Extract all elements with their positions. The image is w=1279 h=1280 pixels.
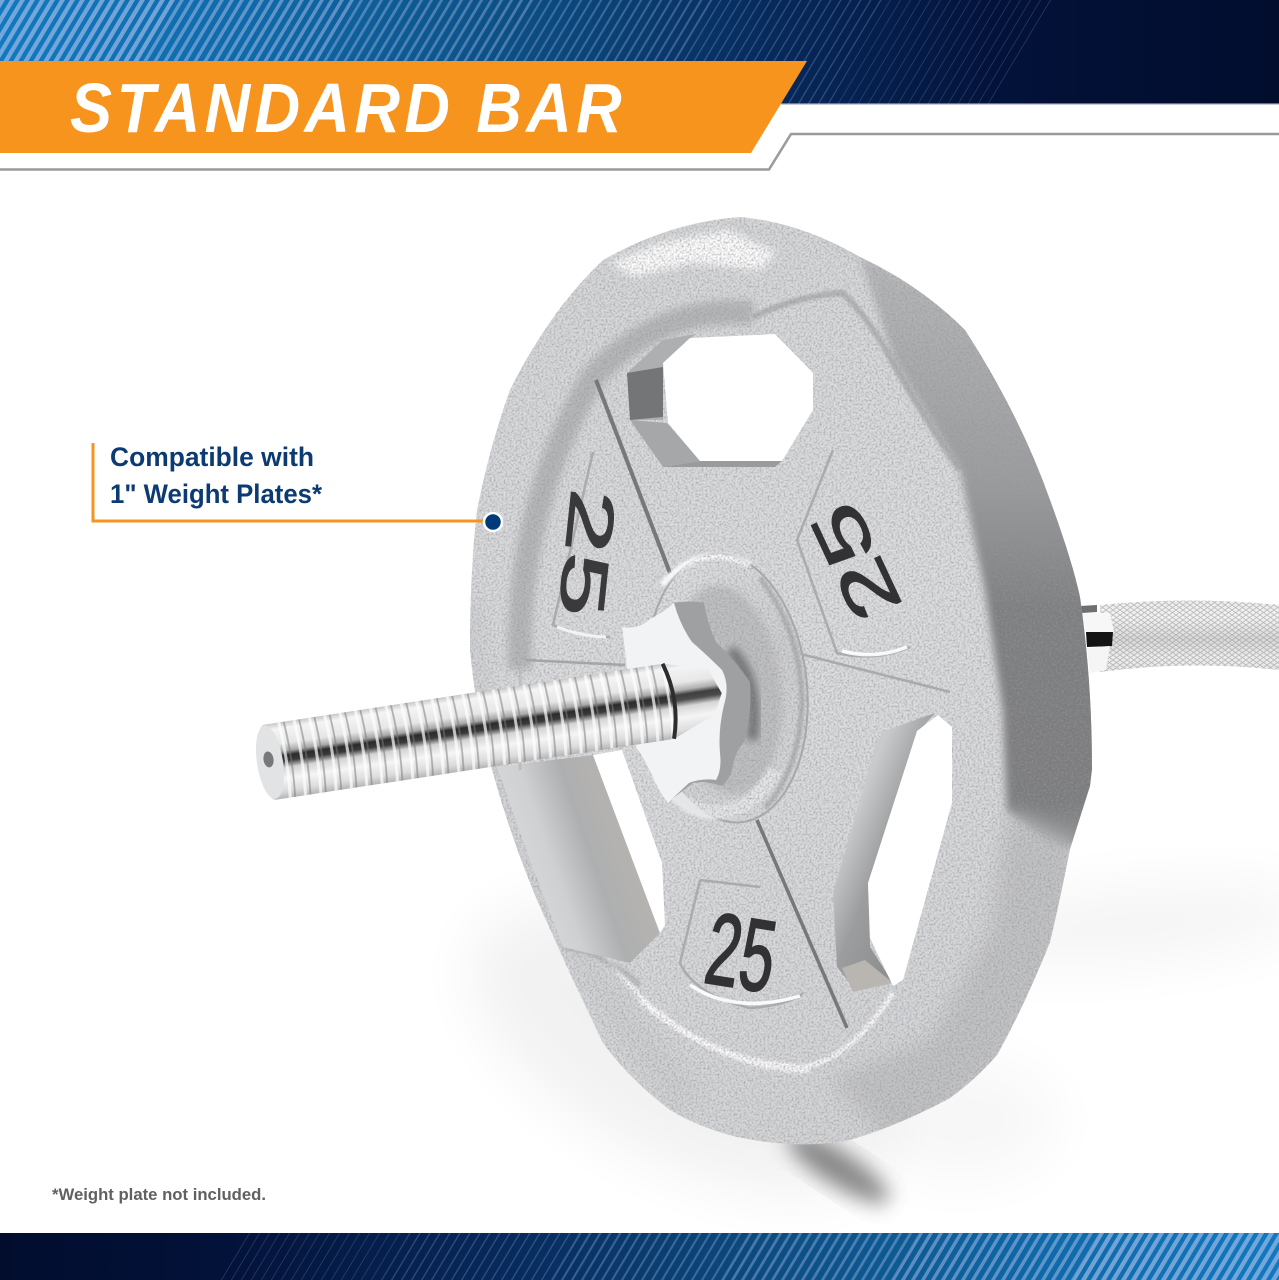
title banner xyxy=(0,61,807,168)
bolt shaft xyxy=(259,663,676,801)
footer band xyxy=(0,1233,1279,1280)
plaque: bottom 25 xyxy=(680,880,803,1014)
plaque: bottom 25: 25 xyxy=(699,891,784,1014)
callout: compatible with 1 inch weight plates: 1" Weight Plates* xyxy=(110,479,323,509)
right opening xyxy=(868,715,952,986)
nut side xyxy=(655,602,750,802)
plaque: right 25: 25 xyxy=(795,491,917,633)
plate texture xyxy=(460,210,1100,1150)
floor shadows xyxy=(425,845,1279,1255)
bolt end cap xyxy=(251,724,288,801)
callout: compatible with 1 inch weight plates xyxy=(93,442,502,531)
hub collar xyxy=(652,552,809,824)
top opening inner wall xyxy=(627,334,782,467)
title: STANDARD BAR xyxy=(70,70,622,148)
plate body xyxy=(470,217,1092,1144)
barbell sleeve behind plate xyxy=(1080,600,1279,673)
left opening wall xyxy=(497,755,660,963)
top opening xyxy=(663,334,813,461)
callout dot xyxy=(484,513,502,531)
header band xyxy=(0,0,1279,105)
header accent line xyxy=(0,134,1279,170)
plaque: right 25 xyxy=(795,450,917,656)
bolt threads xyxy=(273,663,676,798)
spoke grooves xyxy=(520,380,950,1028)
spin-lock nut xyxy=(622,602,750,803)
right opening wall xyxy=(833,713,935,987)
plate shading xyxy=(460,210,1110,1150)
footnote: *Weight plate not included. xyxy=(52,1185,266,1204)
bolt ring xyxy=(663,663,680,739)
left opening xyxy=(593,750,665,933)
nut face xyxy=(622,603,727,803)
plaque: left 25: 25 xyxy=(545,486,629,620)
right opening floor xyxy=(842,960,893,992)
callout leader line xyxy=(93,443,483,521)
callout text: Compatible with xyxy=(110,442,314,472)
bolt taper xyxy=(663,656,727,739)
threaded bolt xyxy=(251,656,727,802)
